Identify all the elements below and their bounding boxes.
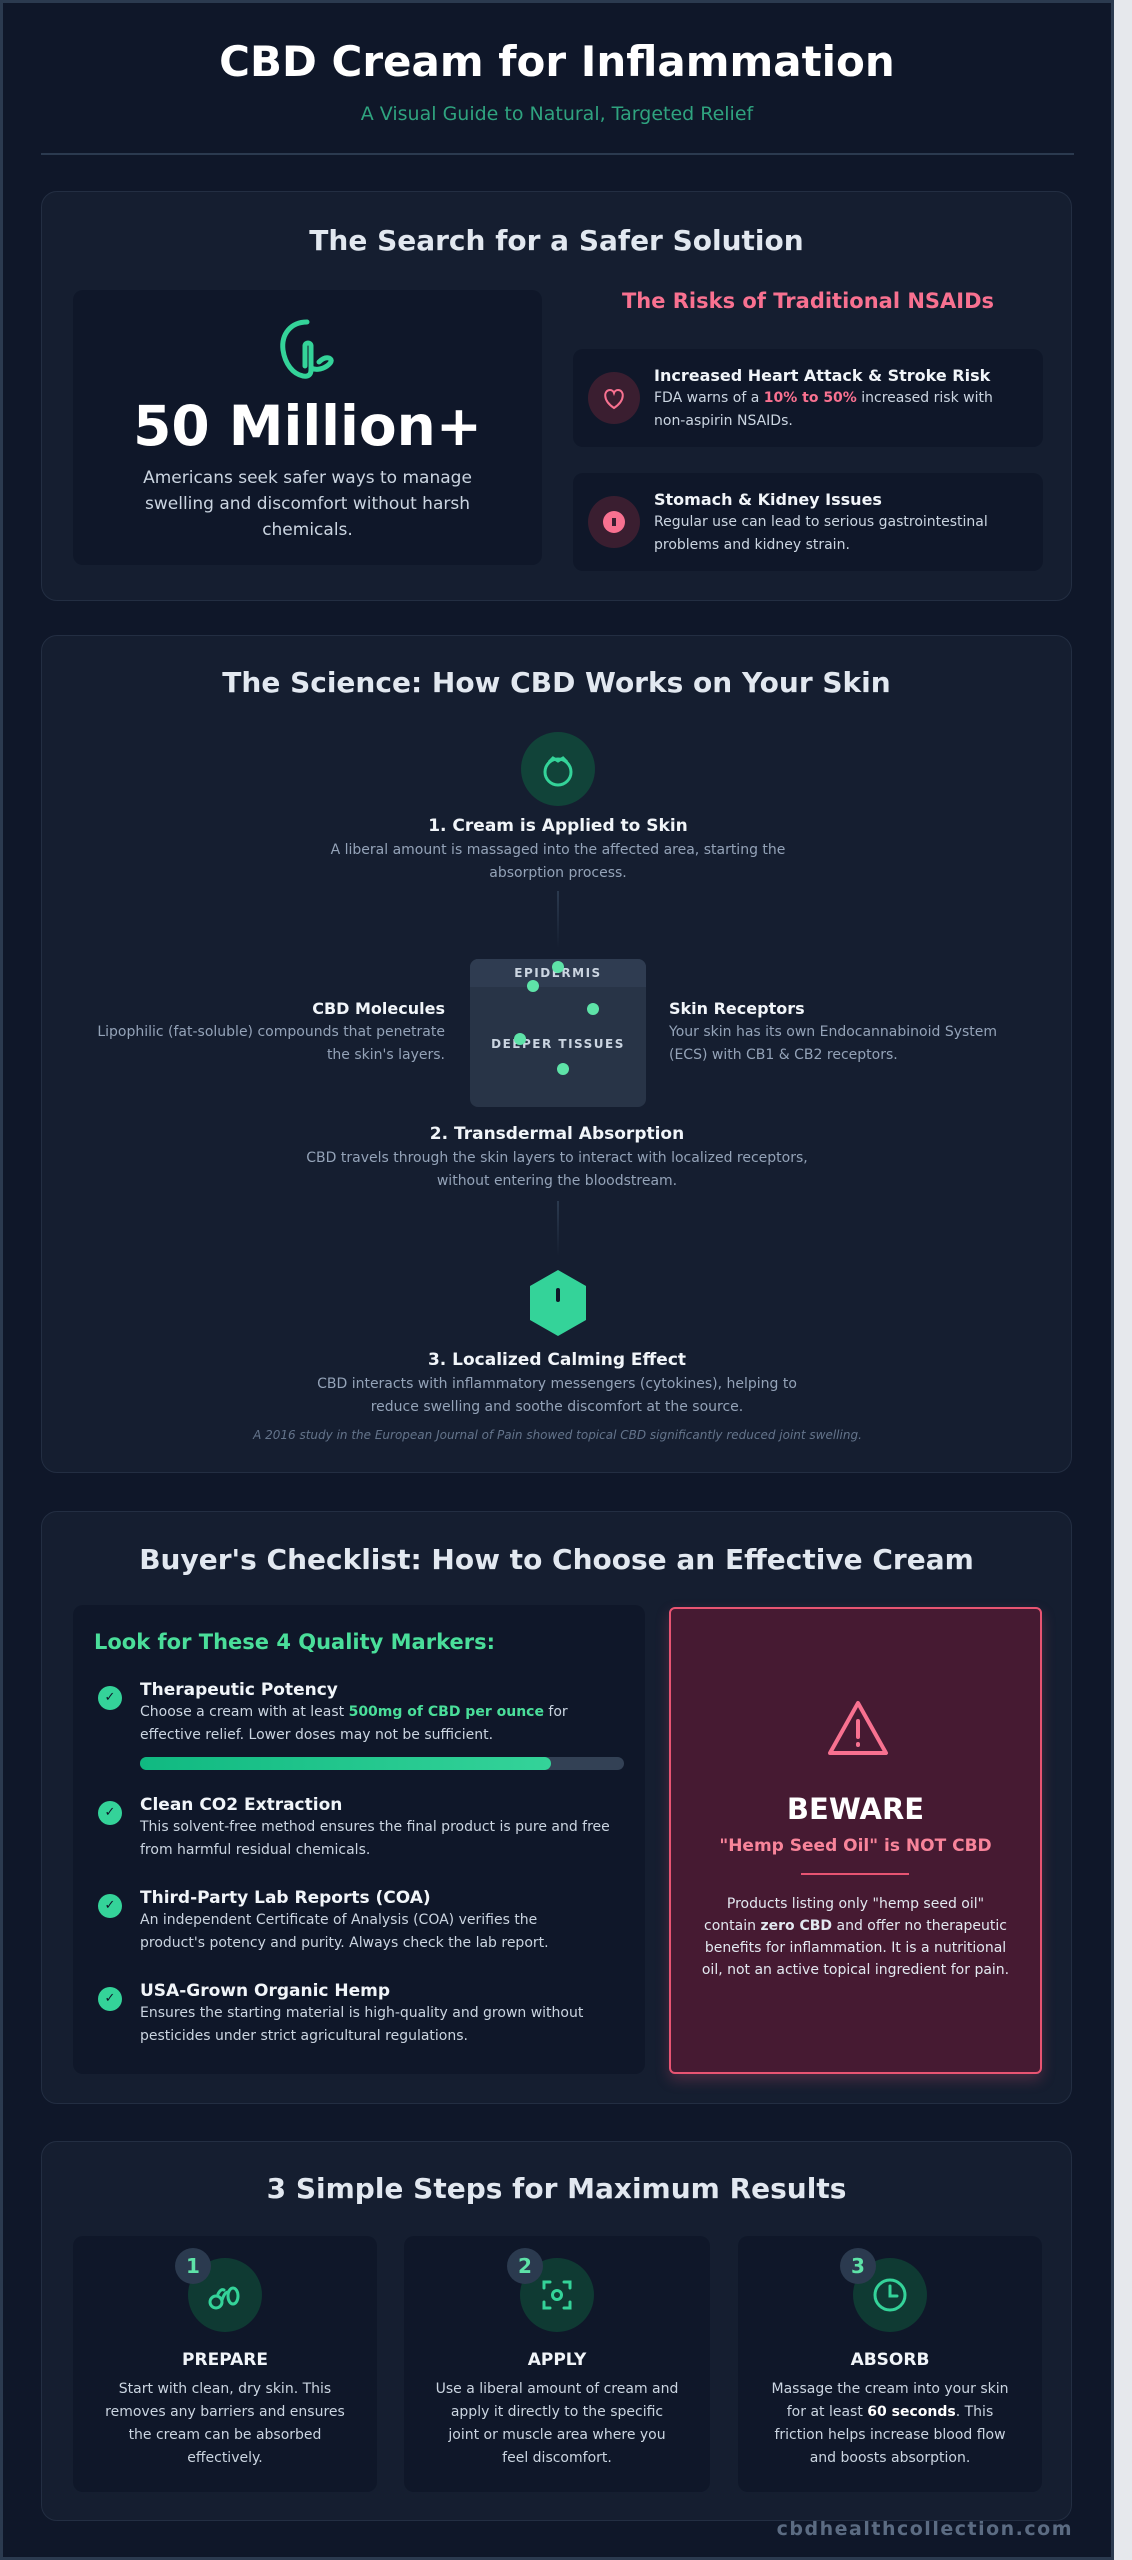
heading: 3 Simple Steps for Maximum Results bbox=[267, 2172, 846, 2205]
risk card: heart: FDA warns of a 10% to 50% increased risk with non-aspirin NSAIDs. bbox=[654, 390, 993, 429]
warning text: Products listing only "hemp seed oil" bbox=[727, 1896, 984, 1912]
checklist card: ✓ bbox=[105, 1690, 115, 1705]
step card: prepare: Start with clean, dry skin. This removes any barriers and ensures the cream can be absorbed effectively. bbox=[105, 2381, 345, 2466]
item: hemp bbox=[98, 1981, 584, 2044]
checklist card: Choose a cream with at least 500mg of CBD per ounce for effective relief. Lower doses may not be sufficient. bbox=[140, 1704, 568, 1743]
step 1 bbox=[330, 816, 785, 881]
icon: cream bbox=[521, 732, 595, 806]
warning box bbox=[669, 1607, 1042, 2074]
step card: absorb bbox=[738, 2236, 1042, 2492]
step card: prepare: PREPARE bbox=[182, 2350, 268, 2370]
label: skin receptors bbox=[669, 999, 997, 1063]
label: skin receptors: Skin Receptors bbox=[669, 999, 805, 1018]
checklist card: USA-Grown Organic Hemp bbox=[140, 1981, 390, 2001]
footer url: cbdhealthcollection.com bbox=[777, 2518, 1073, 2540]
item: CO2 bbox=[98, 1795, 610, 1858]
panel: checklist bbox=[41, 1511, 1072, 2104]
step card: apply: joint or muscle area where you bbox=[448, 2427, 666, 2443]
step card: prepare: 1 bbox=[186, 2254, 200, 2278]
step 2: CBD travels through the skin layers to interact with localized receptors, bbox=[306, 1150, 808, 1166]
label: CBD molecules: CBD Molecules bbox=[312, 999, 445, 1018]
subtitle: A Visual Guide to Natural, Targeted Relief bbox=[361, 103, 753, 125]
icon: stomach bbox=[588, 496, 640, 548]
risk card: stomach: Stomach & Kidney Issues bbox=[654, 490, 882, 509]
label: skin receptors: Your skin has its own Endocannabinoid System (ECS) with CB1 & CB2 receptors. bbox=[669, 1024, 997, 1063]
item: potency bbox=[98, 1680, 624, 1770]
panel: science bbox=[41, 635, 1072, 1473]
checklist card: This solvent-free method ensures the final product is pure and free from harmful residual chemicals. bbox=[140, 1819, 610, 1858]
risk card: stomach bbox=[573, 473, 1043, 571]
step 3: reduce swelling and soothe discomfort at the source. bbox=[371, 1399, 743, 1415]
title: CBD Cream for Inflammation bbox=[219, 37, 895, 86]
icon: heart bbox=[588, 372, 640, 424]
step card: apply: 2 bbox=[518, 2254, 532, 2278]
step 1: A liberal amount is massaged into the affected area, starting the absorption process. bbox=[331, 842, 785, 881]
step card: prepare bbox=[73, 2236, 377, 2492]
heading: Buyer's Checklist: How to Choose an Effective Cream bbox=[139, 1543, 974, 1576]
icon: warning bbox=[828, 1700, 888, 1755]
step card: apply: feel discomfort. bbox=[502, 2450, 612, 2466]
stat text: Americans seek safer ways to manage swelling and discomfort without harsh chemicals. bbox=[143, 468, 472, 540]
step card: absorb: 3 bbox=[851, 2254, 865, 2278]
risk card: heart: Increased Heart Attack & Stroke Risk bbox=[654, 366, 990, 385]
heading: The Science: How CBD Works on Your Skin bbox=[222, 666, 891, 699]
icon: hexagon bbox=[530, 1270, 586, 1336]
step card: absorb: ABSORB bbox=[851, 2350, 929, 2370]
step 3: CBD interacts with inflammatory messengers (cytokines), helping to bbox=[317, 1376, 797, 1392]
checklist card: An independent Certificate of Analysis (COA) verifies the product's potency and purity. Always check the lab report. bbox=[140, 1912, 549, 1951]
step 1: 1. Cream is Applied to Skin bbox=[428, 816, 688, 836]
stat card bbox=[73, 290, 542, 565]
stat number: 50 Million+ bbox=[133, 394, 482, 458]
warning heading: BEWARE bbox=[787, 1792, 924, 1826]
risk card: heart bbox=[573, 349, 1043, 447]
step 2 bbox=[306, 1124, 808, 1189]
checklist card: Third-Party Lab Reports (COA) bbox=[140, 1888, 431, 1908]
step 3: 3. Localized Calming Effect bbox=[428, 1350, 686, 1370]
checklist card: Ensures the starting material is high-quality and grown without pesticides under strict agricultural regulations. bbox=[140, 2005, 583, 2044]
panel: steps bbox=[41, 2141, 1072, 2521]
item: lab reports bbox=[98, 1888, 549, 1951]
risks heading: The Risks of Traditional NSAIDs bbox=[622, 289, 994, 313]
checklist card: ✓ bbox=[105, 1991, 115, 2006]
panel: safer solution bbox=[41, 191, 1072, 601]
warning box: "Hemp Seed Oil" is NOT CBD bbox=[719, 1836, 992, 1856]
step 2: without entering the bloodstream. bbox=[437, 1173, 677, 1189]
step 2: 2. Transdermal Absorption bbox=[430, 1124, 684, 1144]
risk card: stomach: Regular use can lead to serious gastrointestinal problems and kidney strain. bbox=[654, 514, 988, 553]
checklist card: ✓ bbox=[105, 1805, 115, 1820]
icon: hand bbox=[280, 320, 334, 379]
skin diagram: EPIDERMIS bbox=[514, 966, 602, 980]
checklist card: ✓ bbox=[105, 1898, 115, 1913]
heading: The Search for a Safer Solution bbox=[309, 224, 804, 257]
checklist card bbox=[73, 1605, 645, 2074]
checklist card: Clean CO2 Extraction bbox=[140, 1795, 342, 1815]
step card: absorb: Massage the cream into your skin for at least 60 seconds. This friction helps increase blood flow and boosts absorption. bbox=[772, 2381, 1008, 2466]
step card: apply: Use a liberal amount of cream and bbox=[436, 2381, 678, 2397]
label: CBD molecules bbox=[97, 999, 445, 1063]
skin diagram: DEEPER TISSUES bbox=[491, 1037, 625, 1051]
warning text: contain zero CBD and offer no therapeutic benefits for inflammation. It is a nutritional oil, not an active topical ingredient for pain. bbox=[702, 1918, 1009, 1978]
label: CBD molecules: Lipophilic (fat-soluble) compounds that penetrate the skin's layers. bbox=[97, 1024, 445, 1063]
skin diagram bbox=[470, 959, 646, 1107]
footnote: A 2016 study in the European Journal of Pain showed topical CBD significantly reduced joint swelling. bbox=[253, 1428, 862, 1442]
step card: apply: apply it directly to the specific bbox=[451, 2404, 663, 2420]
checklist card: Therapeutic Potency bbox=[140, 1680, 338, 1700]
step 3 bbox=[317, 1350, 797, 1415]
step card: apply: APPLY bbox=[528, 2350, 586, 2370]
checklist heading: Look for These 4 Quality Markers: bbox=[94, 1630, 495, 1654]
step card: apply bbox=[404, 2236, 710, 2492]
